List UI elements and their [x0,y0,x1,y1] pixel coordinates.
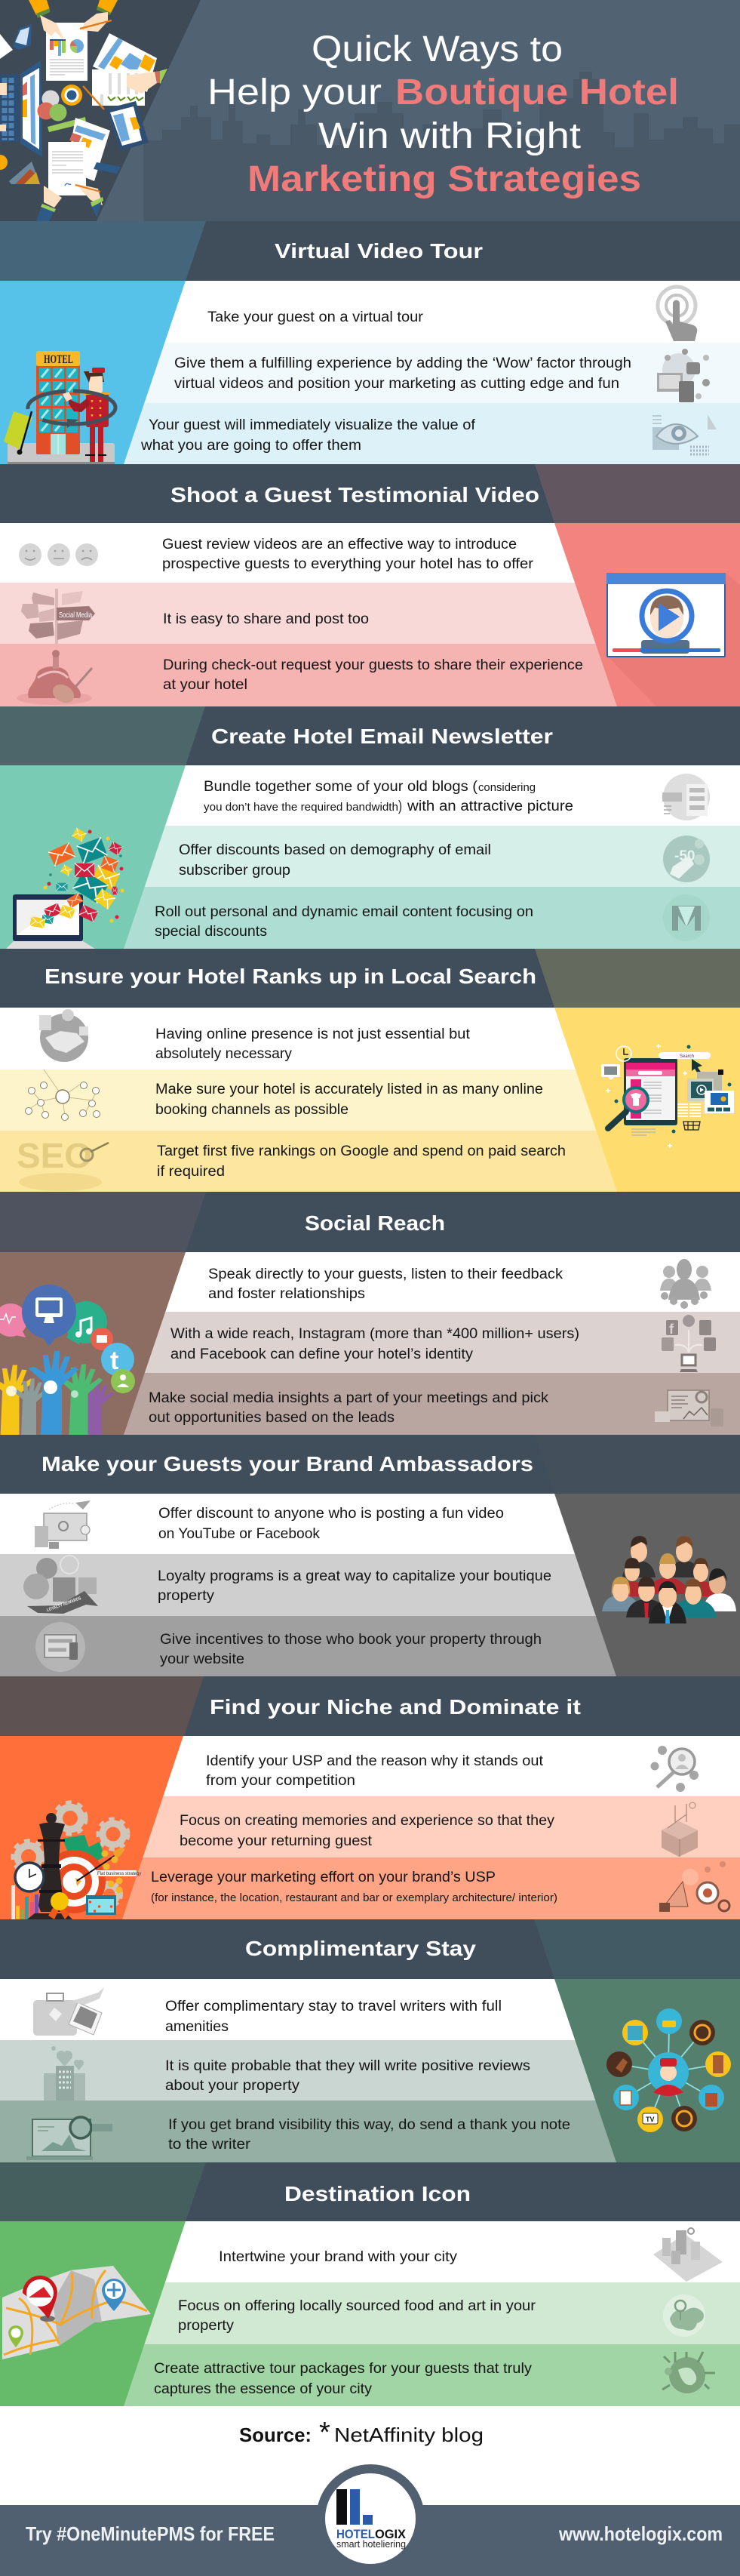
panel: Create Hotel Email Newsletter [0,706,740,949]
illustration: bellhop with services: TV [646,2116,655,2123]
icon: discount: -50 [674,848,695,864]
text: online presence [155,1026,471,1062]
text: discount for video [158,1506,504,1542]
illustration: desk with documents and hands [0,0,167,221]
text: tour packages: Create attractive tour packages for your guests that truly [154,2361,533,2377]
title: Win with Right [318,116,581,156]
icon: connected devices [657,349,710,402]
panel: Social Reach [0,1192,740,1437]
text: leverage USP [151,1870,557,1904]
icon: mail M [663,894,710,941]
icon: dashboard [655,1390,723,1426]
text: booking channels: booking channels as possible [155,1102,349,1118]
text: identify your USP: from your competition [206,1773,355,1789]
text: visualize value: what you are going to offer them [140,438,361,454]
logo: Hotelogix: smart hoteliering [336,2538,406,2550]
text: bundle old blogs [204,779,573,814]
text: incentives [160,1632,542,1667]
text: locally sourced: property [178,2318,235,2334]
icon: loyalty rewards [23,1556,98,1614]
icon: globe with landmarks [662,2352,715,2393]
text: wow factor: virtual videos and position your marketing as cutting edge and fun [174,376,619,392]
icon: target and megaphone [659,1861,729,1912]
heading: Find your Niche and Dominate it [210,1695,581,1719]
panel: Virtual Video Tour [0,221,740,464]
text: identify your USP: Identify your USP and the reason why it stands out [206,1753,544,1769]
text: thank you note: to the writer [168,2137,251,2153]
panel: Shoot a Guest Testimonial Video [0,464,740,706]
source line [239,2417,484,2448]
text: bundle old blogs: ) [398,799,402,814]
source line: NetAffinity blog [334,2424,484,2446]
illustration: hotel and bellhop [4,351,115,464]
text: travel writers: Offer complimentary stay to travel writers with full [165,1999,502,2014]
heading: Complimentary Stay [245,1937,476,1960]
panel: Complimentary Stay [0,1919,740,2162]
text: bundle old blogs: with an attractive picture [407,799,573,814]
icon: suitcase and photos [33,1987,104,2036]
illustration: chess piece and target: Flat business strategy [97,1872,141,1876]
text: wow factor [174,355,631,392]
icon: discount [663,836,710,882]
icon: social media signpost: Social Media [59,611,92,620]
text: easy to share: It is easy to share and post too [163,611,369,627]
text: speak directly: and foster relationships [208,1286,365,1302]
title [207,29,679,199]
heading: Shoot a Guest Testimonial Video [170,483,539,506]
text: check-out request [163,657,583,693]
text: thank you note: If you get brand visibility this way, do send a thank you note [168,2117,570,2133]
illustration: video player [606,573,726,657]
text: positive reviews [165,2058,530,2094]
text: loyalty programs: Loyalty programs is a great way to capitalize your boutique [158,1568,551,1584]
text: loyalty programs [158,1568,551,1604]
heading: Make your Guests your Brand Ambassadors [41,1452,533,1476]
text: booking channels: Make sure your hotel is accurately listed in as many online [155,1082,543,1097]
text: tour packages [154,2361,533,2397]
source line: Source: [239,2424,312,2446]
text: rankings on Google [157,1143,566,1180]
text: guest review videos: prospective guests to everything your hotel has to offer [162,556,534,572]
icon: reception bell [17,650,92,706]
title: Boutique Hotel [395,72,679,112]
text: leverage USP: Leverage your marketing effort on your brand’s USP [151,1870,496,1885]
icon: network of people [26,1069,100,1120]
panel: Find your Niche and Dominate it [0,1676,740,1919]
icon: building and hearts [44,2046,85,2101]
title: Marketing Strategies [247,159,641,199]
text: locally sourced [178,2298,536,2334]
text: wide reach: With a wide reach, Instagram (more than *400 million+ users) [170,1326,579,1342]
panel: header [0,0,740,221]
illustration: laptop and envelopes [6,828,124,949]
text: guest review videos: Guest review videos are an effective way to introduce [162,537,517,552]
text: tour packages: captures the essence of your city [154,2381,373,2397]
text: memories and experience: become your returning guest [180,1833,373,1849]
panel: footer [0,2464,740,2576]
icon: laptop and magnifier [26,2117,112,2160]
text: incentives: your website [160,1651,244,1667]
text: wow factor: Give them a fulfilling experience by adding the ‘Wow’ factor through [174,355,631,371]
text: memories and experience: Focus on creating memories and experience so that they [180,1813,555,1829]
text: discount for video: Offer discount to anyone who is posting a fun video [158,1506,504,1522]
icon: map pin on island [663,2294,705,2337]
text: thank you note [168,2117,570,2153]
text: personal email content: special discounts [155,924,267,940]
illustration: speech bubbles and raised hands [0,1285,135,1437]
text: incentives: Give incentives to those who book your property through [160,1632,542,1648]
footer url: www.hotelogix.com [558,2522,723,2545]
title: Help your [207,72,382,112]
text: personal email content [155,904,533,940]
logo: Hotelogix [325,2473,416,2564]
text: loyalty programs: property [158,1588,215,1604]
text: bundle old blogs: you don’t have the required bandwidth [204,801,398,814]
text: identify your USP [206,1753,544,1789]
text: positive reviews: about your property [165,2078,300,2094]
heading: Destination Icon [284,2182,471,2205]
icon: SEO target: SEO [17,1136,92,1175]
text: speak directly [208,1266,563,1302]
text: speak directly: Speak directly to your guests, listen to their feedback [208,1266,563,1282]
text: online presence: absolutely necessary [155,1046,293,1062]
text: intertwine: Intertwine your brand with your city [219,2249,458,2265]
illustration: chess piece and target [11,1803,141,1919]
illustration: group of guests [602,1536,736,1623]
illustration: map with pins [2,2266,151,2359]
icon: handshake [39,1009,88,1062]
heading: Ensure your Hotel Ranks up in Local Search [45,965,536,988]
left dark wedge [0,0,201,221]
text: wide reach [170,1326,579,1362]
panel: Make your Guests your Brand Ambassadors [0,1435,740,1676]
icon: blog layout [662,774,710,820]
text: offer discounts: subscriber group [179,863,290,879]
text: travel writers: amenities [165,2019,229,2035]
text: locally sourced: Focus on offering locally sourced food and art in your [178,2298,536,2314]
logo: Hotelogix: HOTEL [336,2527,375,2541]
text: take a virtual tour: Take your guest on a virtual tour [207,309,424,325]
heading: Create Hotel Email Newsletter [211,725,553,748]
panel: Ensure your Hotel Ranks up in Local Search [0,949,740,1192]
illustration: speech bubbles and raised hands: t [110,1346,118,1375]
icon: social network links [662,1315,716,1372]
illustration: hotel and bellhop: HOTEL [44,353,73,366]
source line: * [319,2417,330,2448]
footer call to action: Try #OneMinutePMS for FREE [26,2522,275,2545]
logo: Hotelogix: OGIX [375,2527,407,2541]
icon: social media signpost [21,589,95,644]
icon: loyalty rewards: LOYALTY REWARDS [46,1596,81,1613]
icon: people and stars [660,1259,711,1305]
text: social insights: Make social media insights a part of your meetings and pick [149,1390,549,1406]
heading: Social Reach [305,1211,445,1235]
icon: city block [653,2228,723,2282]
text: visualize value [140,417,476,454]
title: Quick Ways to [312,29,563,69]
text: bundle old blogs: considering [478,781,536,794]
text: offer discounts: Offer discounts based on demography of email [179,842,491,858]
icon: touch [658,287,697,341]
icon: social network links: f [669,1322,674,1337]
icon: box [662,1802,698,1857]
text: guest review videos [162,537,534,572]
city skyline [143,72,740,221]
text: offer discounts [179,842,491,879]
text: discount for video: on YouTube or Facebook [158,1526,320,1542]
icon: SEO target [17,1136,109,1191]
icon: booking website [35,1622,85,1672]
text: wide reach: and Facebook can define your hotel’s identity [170,1346,474,1362]
icon: magnifier and people [650,1746,699,1792]
text: online presence: Having online presence is not just essential but [155,1026,471,1042]
text: memories and experience [180,1813,555,1849]
illustration: search on a tablet: Search [680,1054,694,1059]
text: social insights: out opportunities based on the leads [149,1410,395,1426]
text: social insights [149,1390,549,1426]
text: visualize value: Your guest will immediately visualize the value of [149,417,476,433]
text: check-out request: at your hotel [163,677,247,693]
text: personal email content: Roll out personal and dynamic email content focusing on [155,904,533,920]
text: positive reviews: It is quite probable that they will write positive reviews [165,2058,530,2074]
text: check-out request: During check-out request your guests to share their experience [163,657,583,673]
icon: eye [652,414,717,454]
text: rankings on Google: Target first five rankings on Google and spend on paid search [157,1143,566,1159]
text: booking channels [155,1082,543,1118]
text: bundle old blogs: Bundle together some of your old blogs ( [204,779,478,795]
panel: Destination Icon [0,2162,740,2406]
heading: Virtual Video Tour [275,239,483,263]
text: leverage USP: (for instance, the location, restaurant and bar or exemplary architecture/ interior) [151,1891,557,1904]
text: rankings on Google: if required [157,1164,225,1180]
icon: video marketing laptop [35,1500,91,1549]
illustration: bellhop with services [606,2008,731,2132]
illustration: search on a tablet [601,1044,734,1148]
icon: faces [19,543,98,566]
text: travel writers [165,1999,502,2035]
